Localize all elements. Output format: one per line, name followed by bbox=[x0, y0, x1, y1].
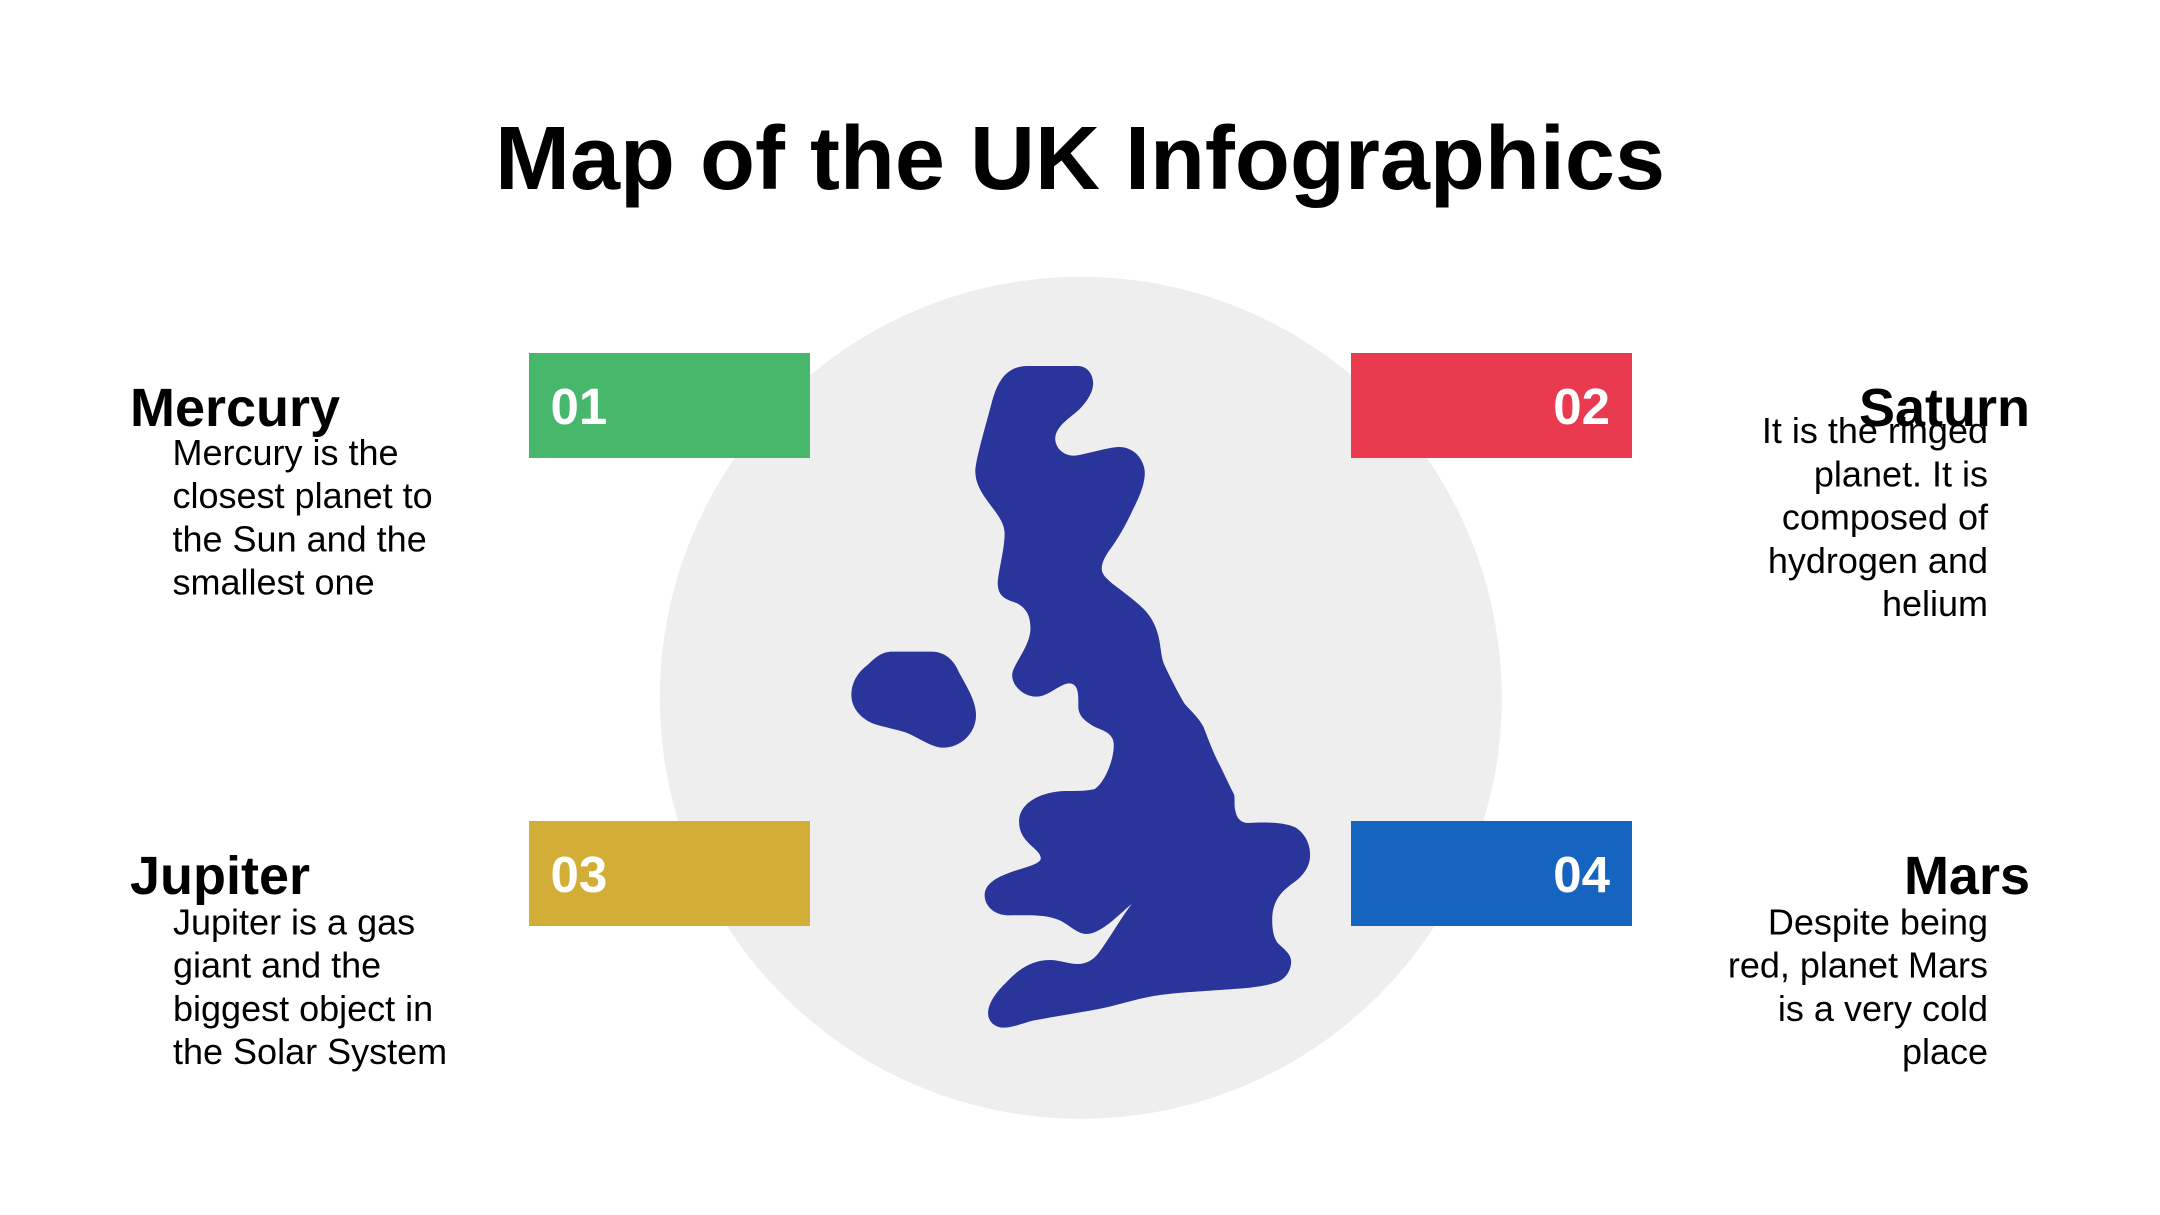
text: Jupiter description: the Solar System bbox=[173, 1031, 447, 1072]
text: Saturn description: planet. It is bbox=[1814, 453, 1988, 494]
panel: 04 Mars bbox=[1351, 821, 2030, 1072]
panel: 02 Saturn bbox=[1351, 353, 2030, 624]
number box 04: 04 bbox=[1553, 846, 1611, 903]
text: Mars description: place bbox=[1902, 1031, 1988, 1072]
number box 02: 02 bbox=[1553, 378, 1610, 435]
number box 04 bbox=[1351, 821, 1632, 926]
text: Mars description: red, planet Mars bbox=[1728, 945, 1988, 986]
text: Saturn description: hydrogen and bbox=[1768, 540, 1988, 581]
heading: Saturn: Saturn bbox=[1859, 378, 2030, 438]
panel: 03 Jupiter bbox=[130, 821, 810, 1072]
map: Great Britain bbox=[975, 366, 1310, 1028]
map: Ireland bbox=[851, 652, 976, 748]
text: Mercury description: smallest one bbox=[172, 562, 375, 603]
number box 03: 03 bbox=[550, 846, 607, 903]
heading: Jupiter: Jupiter bbox=[130, 846, 310, 906]
text: Saturn description: composed of bbox=[1782, 497, 1989, 538]
number box 02 bbox=[1351, 353, 1632, 458]
panel: 01 Mercury bbox=[130, 353, 810, 603]
text: Mercury description: closest planet to bbox=[172, 475, 433, 516]
text: Jupiter description: Jupiter is a gas bbox=[173, 901, 415, 942]
text: Saturn description: It is the ringed bbox=[1762, 410, 1988, 451]
text: Jupiter description: biggest object in bbox=[173, 988, 433, 1029]
heading: Mars: Mars bbox=[1904, 846, 2030, 906]
title: Map of the UK Infographics bbox=[495, 109, 1665, 209]
text: Mars description: is a very cold bbox=[1778, 988, 1988, 1029]
text: Mercury description: Mercury is the bbox=[172, 432, 399, 473]
number box 03 bbox=[529, 821, 810, 926]
heading: Mercury: Mercury bbox=[130, 378, 340, 438]
text: Jupiter description: giant and the bbox=[173, 945, 381, 986]
text: Saturn description: helium bbox=[1882, 583, 1988, 624]
map of the UK bbox=[851, 366, 1310, 1028]
number box 01 bbox=[529, 353, 810, 458]
background circle bbox=[660, 277, 1502, 1119]
number box 01: 01 bbox=[550, 378, 607, 435]
text: Mercury description: the Sun and the bbox=[172, 518, 427, 559]
text: Mars description: Despite being bbox=[1768, 901, 1988, 942]
